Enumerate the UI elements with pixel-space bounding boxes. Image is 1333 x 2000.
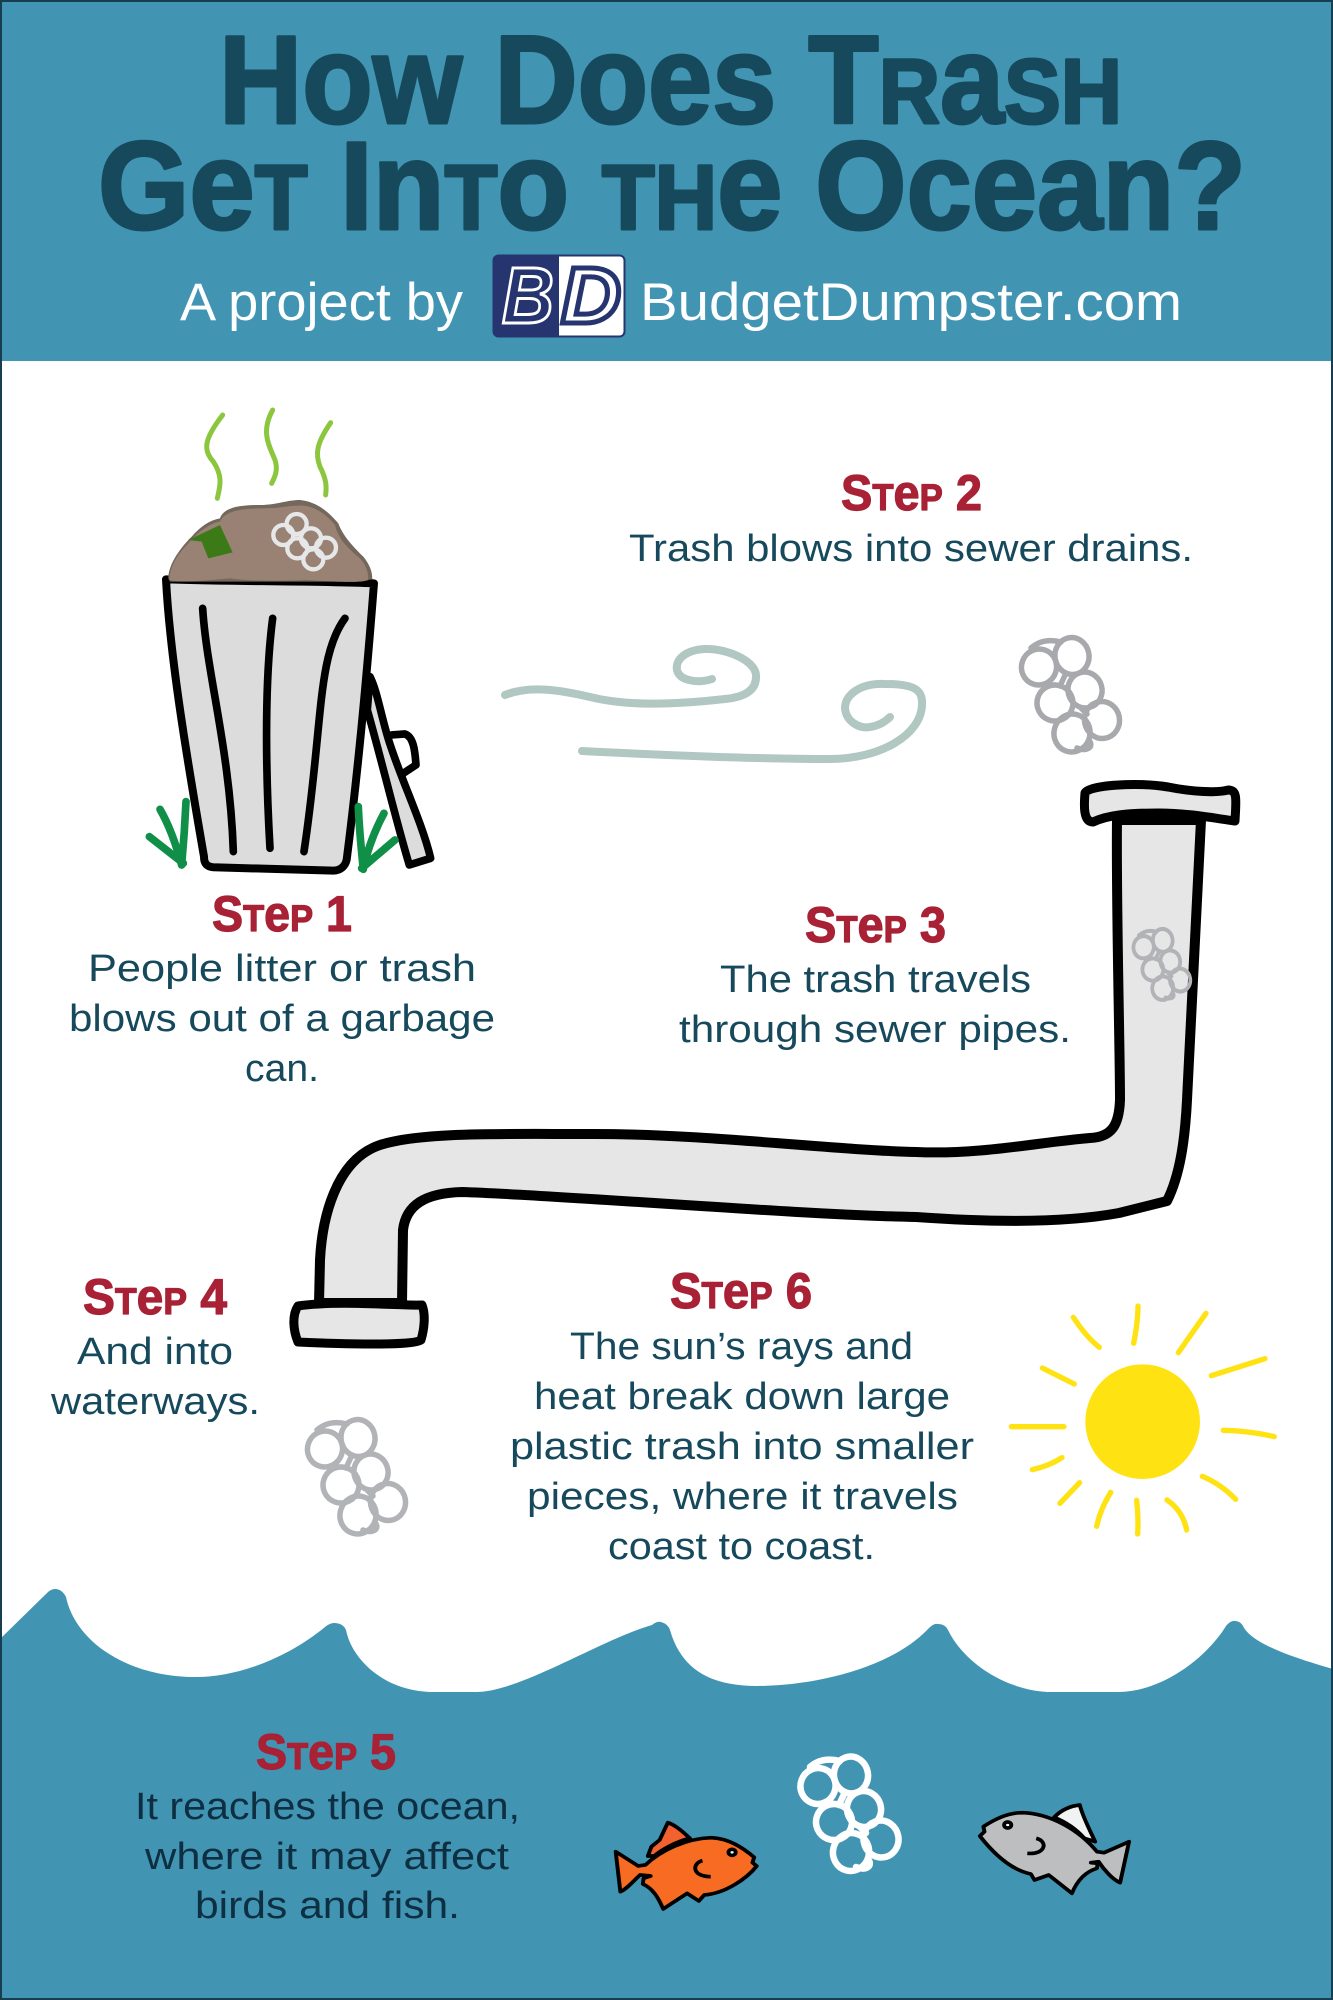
icon: white plastic rings (795, 1754, 901, 1875)
step 3 body: through sewer pipes. (679, 1009, 1071, 1051)
icon: plastic rings near waterway (302, 1417, 408, 1538)
step 1 body: People litter or trash (88, 948, 476, 990)
sewer pipe (294, 785, 1236, 1344)
grass (149, 802, 395, 869)
panel: header (0, 0, 1333, 361)
title: How Does TRaSH (219, 11, 1122, 150)
step 5 text (135, 1724, 520, 1927)
step 6 body: heat break down large (534, 1376, 950, 1418)
title (98, 11, 1246, 256)
step 1 heading: STeP 1 (212, 886, 352, 942)
icon: sun (1011, 1306, 1274, 1534)
step 6 body (510, 1326, 974, 1568)
step 2 body: Trash blows into sewer drains. (629, 528, 1193, 570)
icon: plastic rings blowing (1016, 635, 1122, 756)
logo: BD: B (502, 251, 554, 340)
step 4 body: And into (77, 1331, 233, 1373)
can body (166, 579, 374, 871)
icon: wind (505, 649, 922, 759)
step 5 body: birds and fish. (195, 1885, 460, 1927)
panel: ocean (0, 1589, 1333, 2000)
step 5 heading: STeP 5 (256, 1724, 396, 1780)
logo: BD (493, 251, 624, 340)
pipe bottom cap (294, 1303, 424, 1344)
step 5 body (135, 1786, 520, 1927)
logo: BD: D (561, 251, 621, 340)
icon: orange fish (616, 1823, 757, 1909)
lid (367, 677, 431, 865)
step 4 body (50, 1331, 260, 1423)
step 6 body: The sun’s rays and (570, 1326, 913, 1368)
step 6 body: plastic trash into smaller (510, 1426, 974, 1468)
step 3 body (679, 959, 1071, 1051)
step 3 text (679, 897, 1071, 1051)
step 6 body: coast to coast. (608, 1526, 875, 1568)
subtitle: website: BudgetDumpster.com (640, 273, 1182, 332)
step 1 body: can. (245, 1048, 319, 1090)
step 2 text (629, 465, 1193, 570)
garbage pile (168, 500, 372, 582)
step 3 heading: STeP 3 (805, 897, 946, 953)
step 5 body: It reaches the ocean, (135, 1786, 520, 1828)
icon: gray fish (980, 1805, 1129, 1893)
step 1 text (69, 886, 495, 1090)
step 1 body (69, 948, 495, 1090)
ocean waves (0, 1589, 1333, 2000)
icon: plastic rings in pipe (1130, 927, 1192, 1002)
title: GeT InTo THe Ocean? (98, 117, 1246, 256)
step 1 body: blows out of a garbage (69, 998, 495, 1040)
subtitle: a project by: A project by (180, 273, 464, 332)
stink lines (207, 410, 331, 498)
step 4 heading: STeP 4 (83, 1269, 227, 1325)
step 3 body: The trash travels (720, 959, 1031, 1001)
step 6 heading: STeP 6 (670, 1263, 812, 1319)
step 2 heading: STeP 2 (841, 465, 982, 521)
icon: trash can (149, 410, 431, 871)
step 6 body: pieces, where it travels (527, 1476, 958, 1518)
step 4 body: waterways. (50, 1381, 260, 1423)
pipe top cap (1084, 785, 1236, 822)
step 5 body: where it may affect (144, 1836, 509, 1878)
step 4 text (50, 1269, 260, 1423)
step 6 text (510, 1263, 974, 1568)
